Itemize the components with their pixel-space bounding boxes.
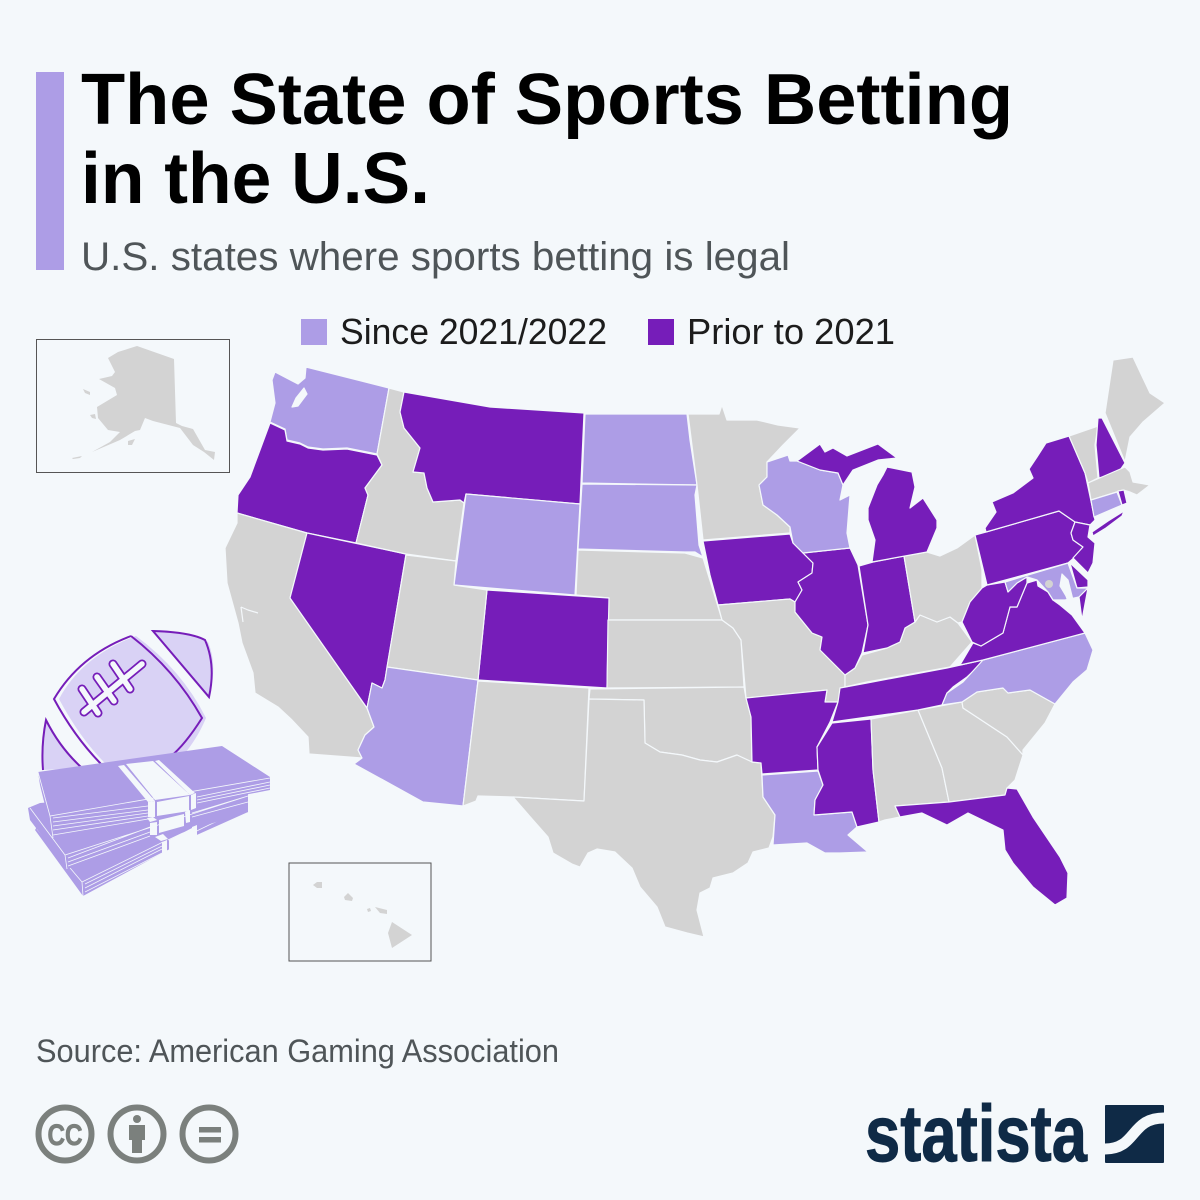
state: Alabama bbox=[871, 710, 949, 822]
state: Montana bbox=[400, 392, 584, 504]
state: North Dakota bbox=[582, 414, 697, 485]
state: New Jersey bbox=[1071, 522, 1095, 573]
inset: Alaska bbox=[36, 340, 230, 472]
US map bbox=[225, 357, 1165, 937]
state: Missouri bbox=[718, 599, 845, 702]
title: in the U.S. bbox=[81, 139, 430, 219]
paper bands bbox=[118, 760, 197, 853]
state: Oklahoma bbox=[589, 687, 752, 762]
state: Mississippi bbox=[814, 719, 879, 827]
state: Colorado bbox=[478, 590, 609, 688]
state: Delaware bbox=[1070, 563, 1088, 588]
icon: no derivatives bbox=[182, 1108, 236, 1160]
state: West Virginia bbox=[962, 577, 1027, 646]
state: Connecticut bbox=[1091, 492, 1122, 517]
title: The State of Sports Betting bbox=[81, 60, 1013, 140]
middle stack edges bbox=[30, 796, 248, 869]
state: Iowa bbox=[703, 534, 813, 605]
state: Tennessee bbox=[832, 660, 983, 722]
state: Oregon bbox=[237, 423, 382, 543]
state: Indiana bbox=[859, 556, 915, 653]
title bbox=[81, 60, 1013, 219]
state: Nebraska bbox=[576, 550, 722, 620]
state: New Hampshire bbox=[1096, 418, 1125, 478]
state: Utah bbox=[387, 555, 487, 680]
state: New Mexico bbox=[463, 681, 589, 806]
subtitle: U.S. states where sports betting is legal bbox=[81, 235, 790, 279]
state: New York, Long Island bbox=[1092, 511, 1124, 536]
Washington DC bbox=[1045, 580, 1053, 588]
top stack edges bbox=[38, 772, 270, 838]
legend: Prior to 2021 bbox=[687, 311, 895, 352]
state: Nevada bbox=[290, 533, 406, 708]
state: South Dakota bbox=[578, 484, 703, 557]
legend: Since 2021/2022 bbox=[340, 311, 607, 352]
state: Maryland bbox=[1005, 563, 1088, 600]
state: Michigan bbox=[797, 444, 937, 562]
state: Idaho bbox=[356, 388, 464, 561]
Chesapeake Bay bbox=[1060, 574, 1080, 625]
state: Wisconsin bbox=[759, 455, 850, 553]
source: Source: American Gaming Association bbox=[36, 1033, 559, 1069]
state: Virginia eastern shore bbox=[1079, 588, 1088, 620]
San Francisco Bay bbox=[241, 607, 258, 622]
inset: Hawaii bbox=[289, 863, 431, 961]
state: Florida bbox=[895, 788, 1068, 905]
football bbox=[42, 631, 213, 770]
state: Rhode Island bbox=[1118, 490, 1127, 505]
state: Arizona bbox=[354, 667, 478, 806]
state: Wyoming bbox=[454, 494, 580, 595]
statista logo: statista bbox=[865, 1089, 1087, 1178]
state: Vermont bbox=[1069, 426, 1098, 483]
icon: creative commons: CC bbox=[48, 1119, 82, 1152]
state: Kansas bbox=[607, 620, 744, 688]
state: California bbox=[225, 513, 374, 758]
stack of bills: middle bbox=[28, 788, 248, 869]
state: New York bbox=[985, 436, 1095, 532]
state: South Carolina bbox=[962, 688, 1055, 755]
legend bbox=[301, 311, 895, 352]
state: Virginia bbox=[960, 580, 1085, 665]
icon: attribution bbox=[110, 1108, 164, 1160]
state: Texas bbox=[513, 699, 775, 937]
state: Arkansas bbox=[746, 690, 838, 774]
state: Maine bbox=[1105, 357, 1165, 462]
state: North Carolina bbox=[942, 633, 1093, 705]
state: Kentucky bbox=[845, 615, 972, 687]
Puget Sound bbox=[292, 388, 307, 407]
state: Illinois bbox=[795, 548, 868, 675]
state: Ohio bbox=[904, 535, 982, 623]
state: Pennsylvania bbox=[975, 511, 1083, 585]
state: Washington bbox=[270, 367, 389, 454]
icon: football and money bbox=[28, 631, 270, 896]
state: Georgia bbox=[918, 702, 1023, 802]
icon: creative commons bbox=[38, 1108, 92, 1160]
title accent bar bbox=[36, 72, 64, 270]
state: Massachusetts bbox=[1088, 467, 1150, 500]
state: Louisiana bbox=[762, 771, 868, 853]
stack of bills: top bbox=[38, 746, 270, 838]
bottom stack edges bbox=[37, 802, 248, 896]
stack of bills: bottom bbox=[35, 790, 248, 896]
state: Minnesota bbox=[688, 405, 800, 540]
